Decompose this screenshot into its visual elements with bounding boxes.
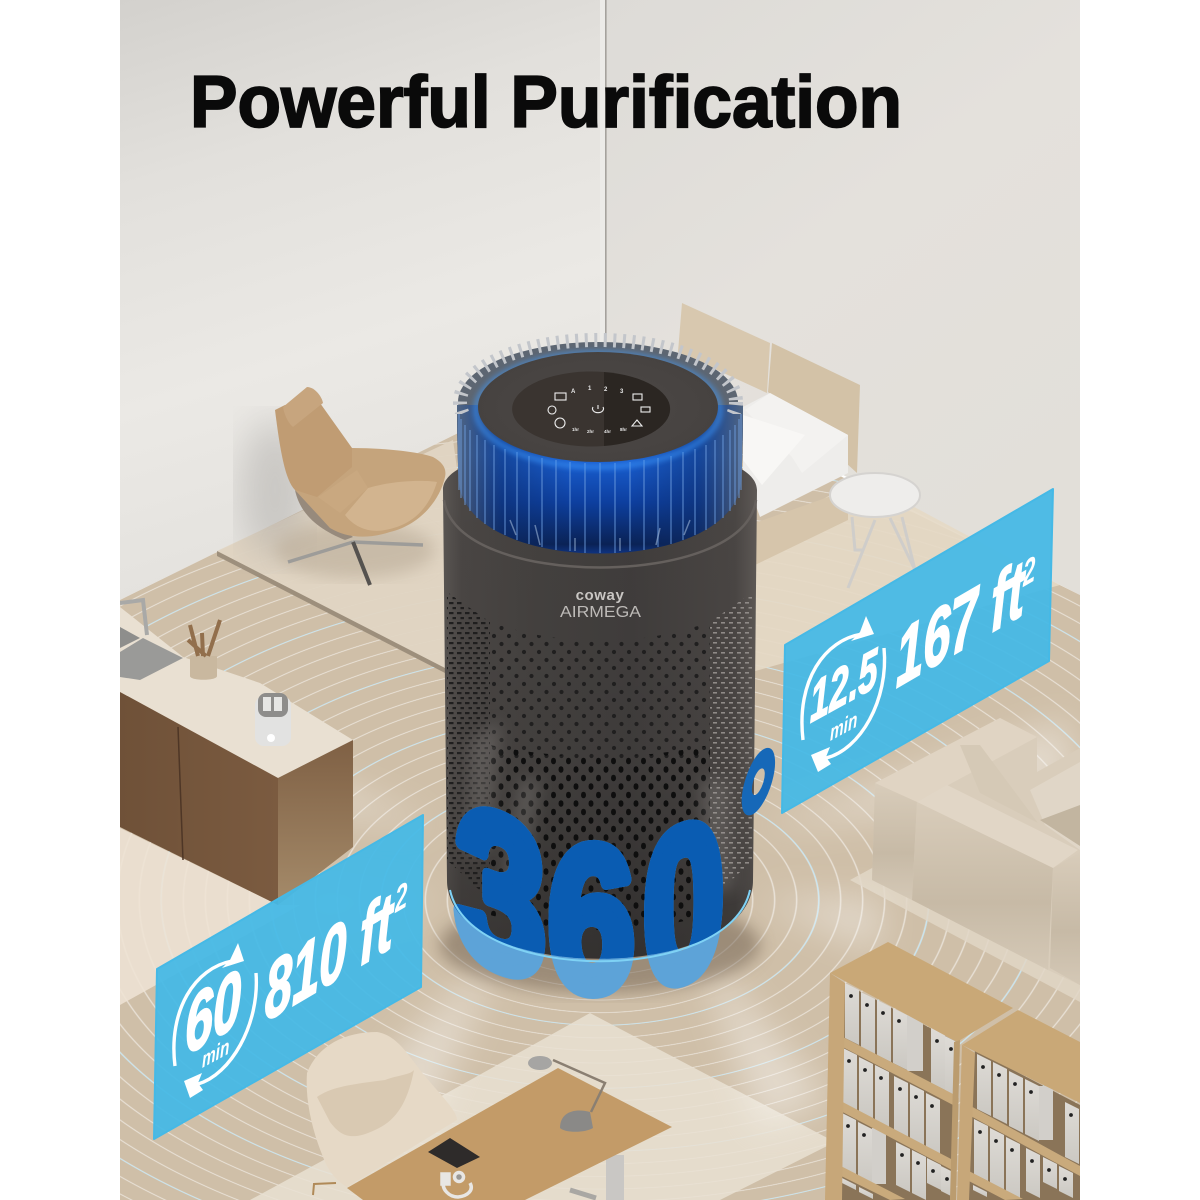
armchair front leg xyxy=(353,542,370,585)
body reflections xyxy=(465,720,735,900)
lighter numerals over floor: 0 xyxy=(643,772,724,1036)
grille side shading xyxy=(457,405,743,554)
sofa arm front xyxy=(872,783,917,900)
purifier body xyxy=(443,445,757,959)
chair foot xyxy=(313,1183,336,1195)
base ring xyxy=(450,890,750,961)
panel background xyxy=(154,815,423,1139)
speed labels: 8hr xyxy=(620,427,627,432)
large perforations xyxy=(490,740,710,950)
grille lower glints xyxy=(510,520,690,551)
bookshelf left xyxy=(825,942,1013,1200)
striped pillow xyxy=(1040,805,1080,846)
speed labels: 4hr xyxy=(604,429,611,434)
chair shell xyxy=(307,1032,457,1187)
speed labels: A xyxy=(571,389,576,395)
coway logo: coway xyxy=(576,587,624,604)
desk top xyxy=(347,1068,672,1200)
air flow rings xyxy=(120,441,1080,1200)
armchair lumbar cushion xyxy=(318,470,368,513)
saturated numerals over body: 6 xyxy=(548,804,635,1034)
mattress xyxy=(743,393,848,517)
front pillow xyxy=(743,415,788,484)
lounge platform xyxy=(217,440,470,680)
shelf boards xyxy=(965,1104,1080,1200)
bedroom floor xyxy=(755,496,1060,671)
min label: min xyxy=(830,707,857,747)
binders xyxy=(973,1054,1079,1199)
sofa base strip xyxy=(850,868,1080,1002)
saturated numerals over body: 3 xyxy=(455,757,546,1030)
sink xyxy=(120,627,183,680)
speed labels: 1hr xyxy=(572,427,579,432)
armchair wall shadow xyxy=(240,420,310,560)
shelf boards xyxy=(833,1033,955,1200)
bed xyxy=(678,303,860,565)
sofa silhouette xyxy=(872,718,1080,985)
headphones xyxy=(442,1172,471,1197)
kitchen counter xyxy=(120,600,353,905)
12.5 label: 12.5 xyxy=(810,636,878,736)
armchair back xyxy=(275,403,352,497)
floor shadow under purifier xyxy=(440,897,760,993)
back fins xyxy=(460,340,736,464)
speed labels: 2hr xyxy=(587,429,594,434)
side table xyxy=(830,473,920,588)
sofa cushion top xyxy=(917,785,1078,868)
wall corner line xyxy=(600,0,607,360)
lower-left floor xyxy=(120,828,271,1005)
right side perforations xyxy=(710,590,753,900)
sofa end cushion xyxy=(1050,852,1080,985)
cap glow ring xyxy=(476,353,720,467)
left side perforations xyxy=(447,590,490,900)
airmega logo: AIRMEGA xyxy=(560,604,641,621)
toaster xyxy=(255,693,291,746)
info panel: 12.5 min 167 ft2 xyxy=(782,489,1053,813)
60 label: 60 xyxy=(185,951,241,1073)
superscript 2: 2 xyxy=(394,873,408,921)
810 ft label: 810 ft xyxy=(265,873,395,1039)
desk leg xyxy=(570,1155,624,1200)
superscript 2: 2 xyxy=(1022,547,1036,595)
shelf left post xyxy=(957,1045,975,1200)
sofa seat xyxy=(1030,762,1080,850)
binders xyxy=(842,983,959,1200)
right headboard cushion xyxy=(768,343,860,473)
desk rug xyxy=(250,1013,835,1200)
circular arrows icon xyxy=(174,943,256,1098)
shelf top xyxy=(962,1010,1080,1103)
floor xyxy=(120,360,1080,1200)
rear pillow xyxy=(770,393,848,435)
counter top xyxy=(120,607,353,778)
desk xyxy=(347,1056,672,1200)
sofa cushion front xyxy=(912,802,1053,970)
panel background xyxy=(782,489,1053,813)
body shading xyxy=(443,445,757,959)
body rim highlight xyxy=(444,500,756,568)
saturated numerals over body: 0 xyxy=(643,772,724,1036)
grille ribs xyxy=(459,414,741,553)
title: Powerful Purification xyxy=(190,62,902,143)
faucet xyxy=(120,600,147,635)
shelf left post xyxy=(825,973,845,1200)
room scene xyxy=(120,0,1080,1200)
armchair shell underside xyxy=(295,490,353,540)
desk lamp xyxy=(528,1056,605,1132)
centre perforations xyxy=(490,610,710,760)
counter front xyxy=(120,692,278,905)
top cap xyxy=(478,352,718,462)
cabinet seam xyxy=(178,727,183,860)
armchair seat xyxy=(295,448,445,537)
speed labels xyxy=(571,386,627,434)
shelf right post xyxy=(950,1040,960,1200)
tablet xyxy=(428,1138,480,1168)
left wall xyxy=(120,0,606,600)
right wall xyxy=(606,0,1080,595)
panel icons xyxy=(548,393,650,428)
shelf back xyxy=(830,980,957,1200)
sofa arm top xyxy=(875,718,1037,802)
utensil pot xyxy=(188,620,220,680)
armchair legs xyxy=(288,542,423,562)
air purifier xyxy=(443,340,757,959)
lighter numerals over floor: 6 xyxy=(548,804,635,1034)
speed labels: 3 xyxy=(620,389,624,395)
soft light around base xyxy=(320,716,1080,1125)
shelf top xyxy=(830,942,1013,1042)
lighter numerals over floor xyxy=(455,757,724,1036)
touch panel xyxy=(512,372,670,446)
left headboard cushion xyxy=(678,303,770,393)
speed labels: 2 xyxy=(604,387,608,393)
circular arrows icon xyxy=(802,616,885,772)
360 degree label xyxy=(450,711,794,1036)
sofa xyxy=(872,718,1080,985)
degree symbol: ° xyxy=(700,711,794,933)
bookshelf right xyxy=(957,1010,1080,1200)
panel left half xyxy=(512,372,604,446)
armchair headrest xyxy=(283,387,323,427)
min label: min xyxy=(202,1034,229,1074)
panel right half xyxy=(604,372,670,446)
chair seat fold xyxy=(317,1070,414,1136)
armchair seat pad xyxy=(345,481,437,531)
back fins base xyxy=(458,342,738,462)
blue grille band xyxy=(457,405,743,554)
office chair xyxy=(307,1032,457,1195)
saturated numerals over body xyxy=(455,757,724,1036)
167 ft label: 167 ft xyxy=(896,541,1026,705)
armchair xyxy=(240,387,445,585)
speed labels: 1 xyxy=(588,386,592,392)
shelf back xyxy=(960,1050,1080,1200)
counter right face xyxy=(278,740,353,905)
info panel: 60 min 810 ft2 xyxy=(154,815,423,1139)
lighter numerals over floor: 3 xyxy=(455,757,546,1030)
armchair floor shadow xyxy=(275,522,435,578)
sofa pillow xyxy=(960,745,1038,823)
bed frame xyxy=(756,497,848,564)
